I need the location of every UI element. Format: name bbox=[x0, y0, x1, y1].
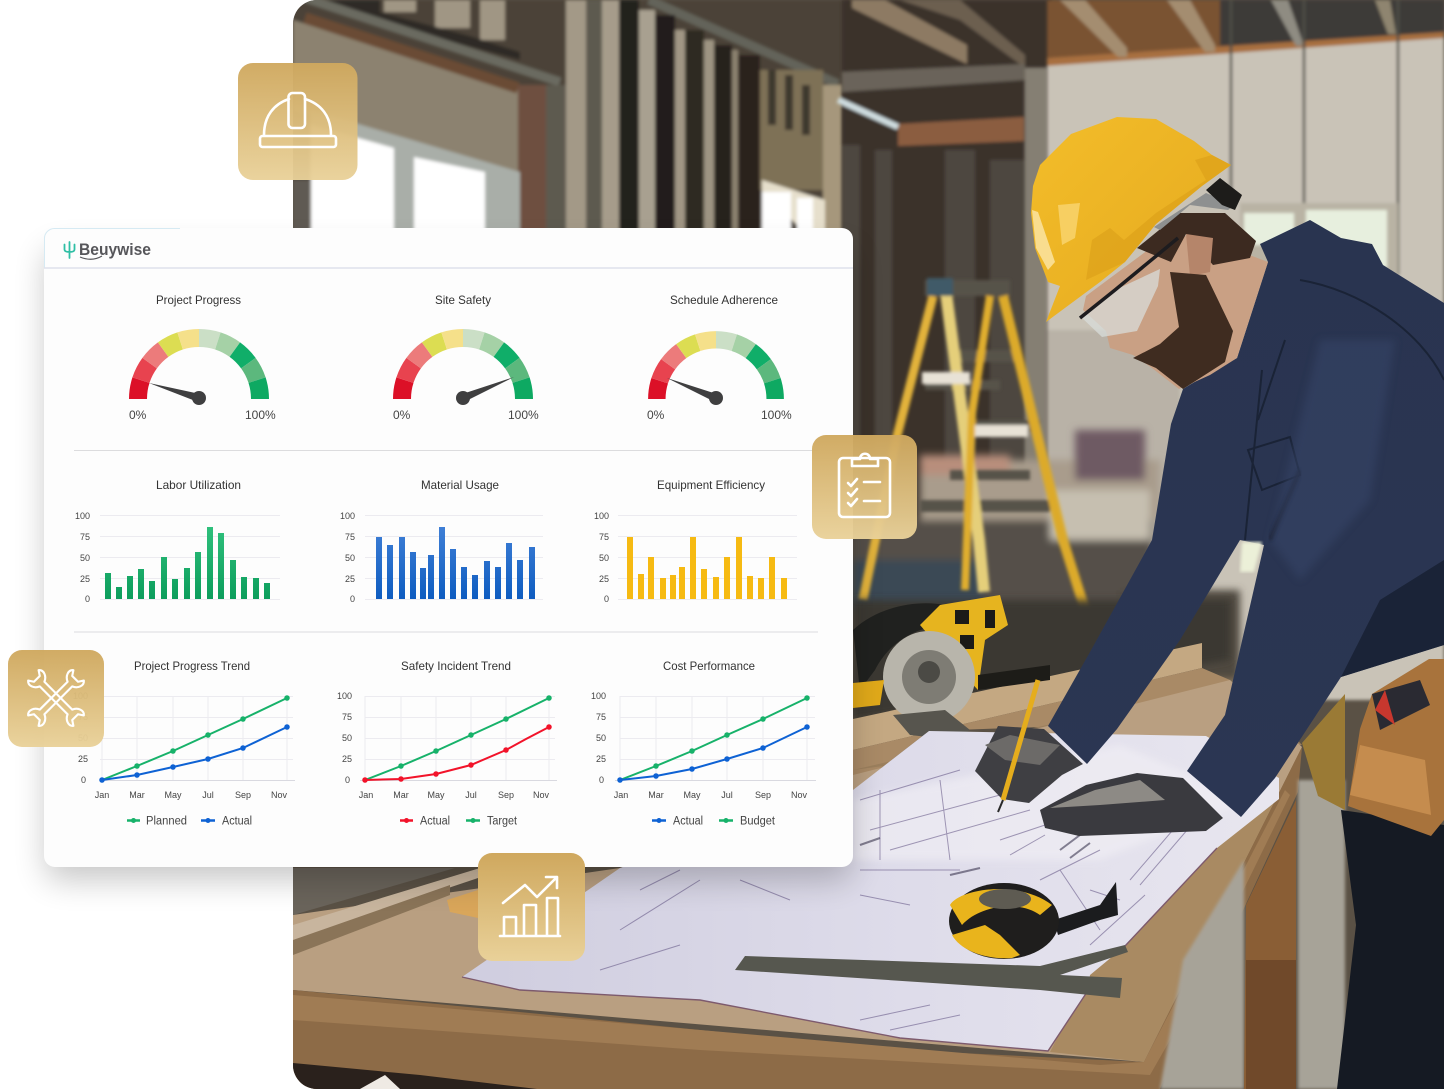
photo: tool belt pouches bbox=[1302, 659, 1444, 836]
line chart: Safety Incident Trend: 75 bbox=[342, 712, 352, 722]
photo: yellow step ladder bbox=[863, 278, 1086, 613]
bar chart: Labor Utilization: 25 bbox=[80, 574, 90, 584]
gauge: Schedule Adherence: Schedule Adherence bbox=[670, 293, 778, 307]
gauge: Site Safety: 0% bbox=[393, 408, 411, 422]
legend: Actual bbox=[420, 816, 450, 828]
line chart: Cost Performance: May bbox=[683, 790, 701, 800]
legend bbox=[127, 816, 252, 828]
gauge: Schedule Adherence bbox=[647, 293, 792, 422]
bar chart: Equipment Efficiency: 0 bbox=[604, 594, 609, 604]
photo: gloves and pencil bbox=[975, 680, 1223, 836]
bar chart: Labor Utilization: 50 bbox=[80, 553, 90, 563]
line chart: Cost Performance: Jan bbox=[614, 790, 628, 800]
line chart: Safety Incident Trend bbox=[337, 659, 557, 828]
line chart: Safety Incident Trend: 25 bbox=[342, 754, 352, 764]
photo: drywall wall and rear window bbox=[1047, 0, 1444, 700]
gauge: Site Safety bbox=[393, 293, 539, 422]
line chart: Safety Incident Trend: 50 bbox=[342, 733, 352, 743]
line chart: Safety Incident Trend: Jan bbox=[359, 790, 373, 800]
gauge: Project Progress: Project Progress bbox=[156, 293, 241, 307]
bar chart: Labor Utilization: Labor Utilization bbox=[156, 478, 241, 492]
line chart: Cost Performance: 0 bbox=[599, 775, 604, 785]
photo: worker's hoodie torso and arms bbox=[1048, 220, 1444, 817]
legend: Planned bbox=[146, 816, 187, 828]
bar chart: Material Usage: 100 bbox=[340, 511, 355, 521]
line chart: Project Progress Trend: Jan bbox=[95, 790, 109, 800]
bar chart: Material Usage: Material Usage bbox=[421, 478, 499, 492]
bar chart: Equipment Efficiency: 25 bbox=[599, 574, 609, 584]
line chart: Cost Performance: Sep bbox=[755, 790, 771, 800]
photo: worker's jeans bbox=[1337, 810, 1444, 1089]
bar chart: Material Usage: 75 bbox=[345, 532, 355, 542]
dashboard card bbox=[44, 228, 853, 867]
background photo: construction worker at table bbox=[293, 0, 1444, 1089]
bar chart: Material Usage: 50 bbox=[345, 553, 355, 563]
line chart: Cost Performance: Jul bbox=[721, 790, 733, 800]
photo: blueprints on the table bbox=[462, 731, 1279, 1051]
line chart: Project Progress Trend: May bbox=[164, 790, 182, 800]
bar chart: Equipment Efficiency bbox=[594, 478, 797, 604]
bar chart: Material Usage bbox=[340, 478, 543, 604]
line chart: Safety Incident Trend: 100 bbox=[337, 691, 352, 701]
bar chart: Labor Utilization: 75 bbox=[80, 532, 90, 542]
photo: ceiling joists and dark studs bbox=[838, 0, 1052, 540]
line chart: Project Progress Trend: Sep bbox=[235, 790, 251, 800]
icon tile: hard hat bbox=[238, 63, 358, 180]
line chart: Project Progress Trend: 50 bbox=[78, 733, 88, 743]
bar chart: Labor Utilization: 0 bbox=[85, 594, 90, 604]
line chart: Cost Performance: Mar bbox=[648, 790, 664, 800]
bar chart: Material Usage: 0 bbox=[350, 594, 355, 604]
line chart: Safety Incident Trend: Sep bbox=[498, 790, 514, 800]
bar chart: Equipment Efficiency: 50 bbox=[599, 553, 609, 563]
icon tile: growth chart bbox=[478, 853, 585, 961]
line chart: Safety Incident Trend: Safety Incident Trend bbox=[401, 659, 511, 673]
photo: blurred debris on shelf bbox=[853, 425, 1246, 682]
photo: tape measure bbox=[949, 882, 1118, 959]
line chart: Safety Incident Trend: Nov bbox=[533, 790, 549, 800]
gauge: Site Safety: Site Safety bbox=[435, 293, 491, 307]
legend: Actual bbox=[222, 816, 252, 828]
photo: steel ruler bbox=[735, 945, 1128, 998]
legend: Target bbox=[487, 816, 518, 828]
divider lines bbox=[74, 450, 818, 632]
line chart: Cost Performance: 100 bbox=[591, 691, 606, 701]
line chart: Project Progress Trend: Project Progress Trend bbox=[134, 659, 250, 673]
line chart: Project Progress Trend bbox=[73, 659, 295, 828]
legend: Actual bbox=[673, 816, 703, 828]
line chart: Safety Incident Trend: Mar bbox=[393, 790, 409, 800]
dashboard card shadow bbox=[46, 250, 852, 880]
line chart: Safety Incident Trend: May bbox=[427, 790, 445, 800]
bar chart: Equipment Efficiency: 75 bbox=[599, 532, 609, 542]
photo: worker's face and beard bbox=[1080, 213, 1268, 389]
gauge: Project Progress bbox=[129, 293, 276, 422]
line chart: Project Progress Trend: 0 bbox=[81, 775, 86, 785]
line chart: Safety Incident Trend: Jul bbox=[465, 790, 477, 800]
legend bbox=[400, 816, 518, 828]
bar chart: Labor Utilization bbox=[75, 478, 280, 604]
legend: Budget bbox=[740, 816, 776, 828]
brand logo: Beuywise bbox=[79, 240, 151, 259]
line chart: Cost Performance: Nov bbox=[791, 790, 807, 800]
bar chart: Labor Utilization: 100 bbox=[75, 511, 90, 521]
gauge: Site Safety: 100% bbox=[508, 408, 539, 422]
legend bbox=[652, 816, 776, 828]
line chart: Project Progress Trend: 75 bbox=[78, 712, 88, 722]
line chart: Project Progress Trend: Mar bbox=[129, 790, 145, 800]
photo: framed wall with studs and windows bbox=[293, 0, 853, 240]
line chart: Cost Performance bbox=[591, 659, 816, 828]
line chart: Project Progress Trend: Jul bbox=[202, 790, 214, 800]
line chart: Cost Performance: 75 bbox=[596, 712, 606, 722]
line chart: Safety Incident Trend: 0 bbox=[345, 775, 350, 785]
photo: table leg and floor bbox=[1160, 780, 1345, 1089]
gauge: Project Progress: 0% bbox=[129, 408, 147, 422]
gauge: Project Progress: 100% bbox=[245, 408, 276, 422]
line chart: Cost Performance: Cost Performance bbox=[663, 659, 755, 673]
bar chart: Equipment Efficiency: Equipment Efficiency bbox=[657, 478, 765, 492]
line chart: Project Progress Trend: 100 bbox=[73, 691, 88, 701]
icon tile: crossed wrenches bbox=[8, 650, 104, 747]
line chart: Project Progress Trend: 25 bbox=[78, 754, 88, 764]
bar chart: Material Usage: 25 bbox=[345, 574, 355, 584]
gauge: Schedule Adherence: 0% bbox=[647, 408, 665, 422]
bar chart: Equipment Efficiency: 100 bbox=[594, 511, 609, 521]
photo: back planks and circular saw bbox=[853, 595, 1302, 790]
line chart: Project Progress Trend: Nov bbox=[271, 790, 287, 800]
gauge: Schedule Adherence: 100% bbox=[761, 408, 792, 422]
line chart: Cost Performance: 50 bbox=[596, 733, 606, 743]
photo: yellow hard hat bbox=[1031, 117, 1242, 322]
line chart: Cost Performance: 25 bbox=[596, 754, 606, 764]
photo: workbench table bbox=[293, 680, 1302, 1089]
icon tile: clipboard checklist bbox=[812, 435, 917, 539]
